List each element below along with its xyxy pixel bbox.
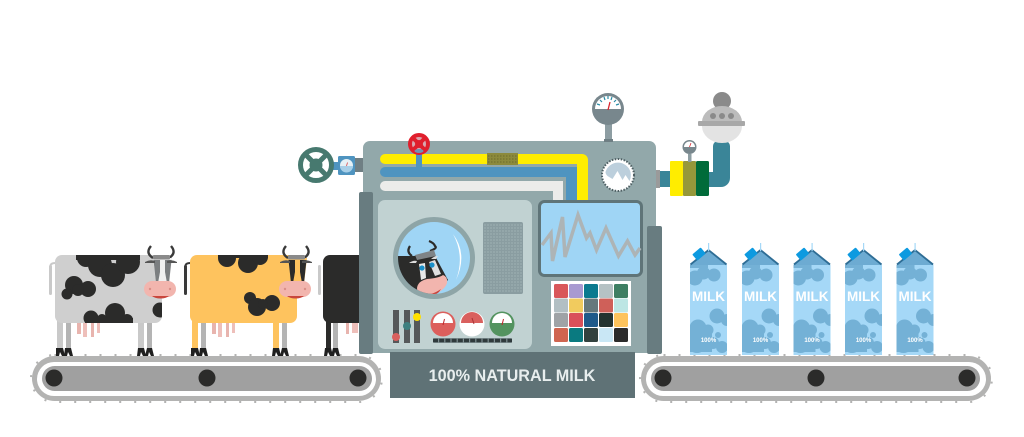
colour button grid xyxy=(551,281,631,346)
indicator strip xyxy=(433,338,512,343)
pipe: yellow xyxy=(380,154,588,200)
monitor with line chart xyxy=(540,202,642,276)
cow: yellow with black spots xyxy=(184,246,312,356)
milk carton 2: 100% xyxy=(753,338,769,344)
gauge: red xyxy=(430,312,456,336)
pipe: white xyxy=(380,181,563,200)
valve wheel: teal with inline gauge xyxy=(300,150,363,180)
control panel xyxy=(378,200,532,349)
conveyor: right xyxy=(640,355,992,402)
sliders xyxy=(392,310,421,343)
machine side post: left xyxy=(359,192,373,354)
milk carton 2: MILK xyxy=(744,289,777,304)
milk carton 3: MILK xyxy=(796,289,829,304)
milk carton 1: 100% xyxy=(701,338,717,344)
cow: grey with black spots xyxy=(49,246,177,356)
milk carton 4: 100% xyxy=(856,338,872,344)
porthole with cow xyxy=(392,217,475,299)
pipe mesh filter xyxy=(487,153,518,165)
machine side post: right xyxy=(647,226,662,354)
milk carton 4: MILK xyxy=(847,289,880,304)
gauge: green xyxy=(490,312,514,336)
pressure gauge: top xyxy=(592,93,624,142)
pipe: blue xyxy=(380,167,577,200)
valve: red xyxy=(410,135,428,168)
speaker grille xyxy=(483,222,523,294)
milk carton 3: 100% xyxy=(804,338,820,344)
milk carton 5 xyxy=(894,243,940,355)
cow: black, entering machine xyxy=(318,255,368,356)
milk carton 2 xyxy=(739,243,785,355)
machine base label xyxy=(390,352,635,398)
conveyor: left xyxy=(31,355,382,402)
milk carton 1 xyxy=(687,243,733,355)
machine base label: 100% NATURAL MILK xyxy=(429,367,596,385)
milk carton 1: MILK xyxy=(692,289,725,304)
gauge: white with red dial xyxy=(460,312,484,336)
milk carton 4 xyxy=(842,243,888,355)
milk carton 5: MILK xyxy=(898,289,932,304)
milk carton 3 xyxy=(790,243,836,355)
machine body xyxy=(363,141,656,353)
milk carton 5: 100% xyxy=(907,338,923,344)
outlet pipe with coloured couplings xyxy=(656,141,730,196)
dome dispenser xyxy=(698,92,745,143)
round window with peaks xyxy=(602,159,634,191)
small pressure gauge xyxy=(682,140,696,162)
